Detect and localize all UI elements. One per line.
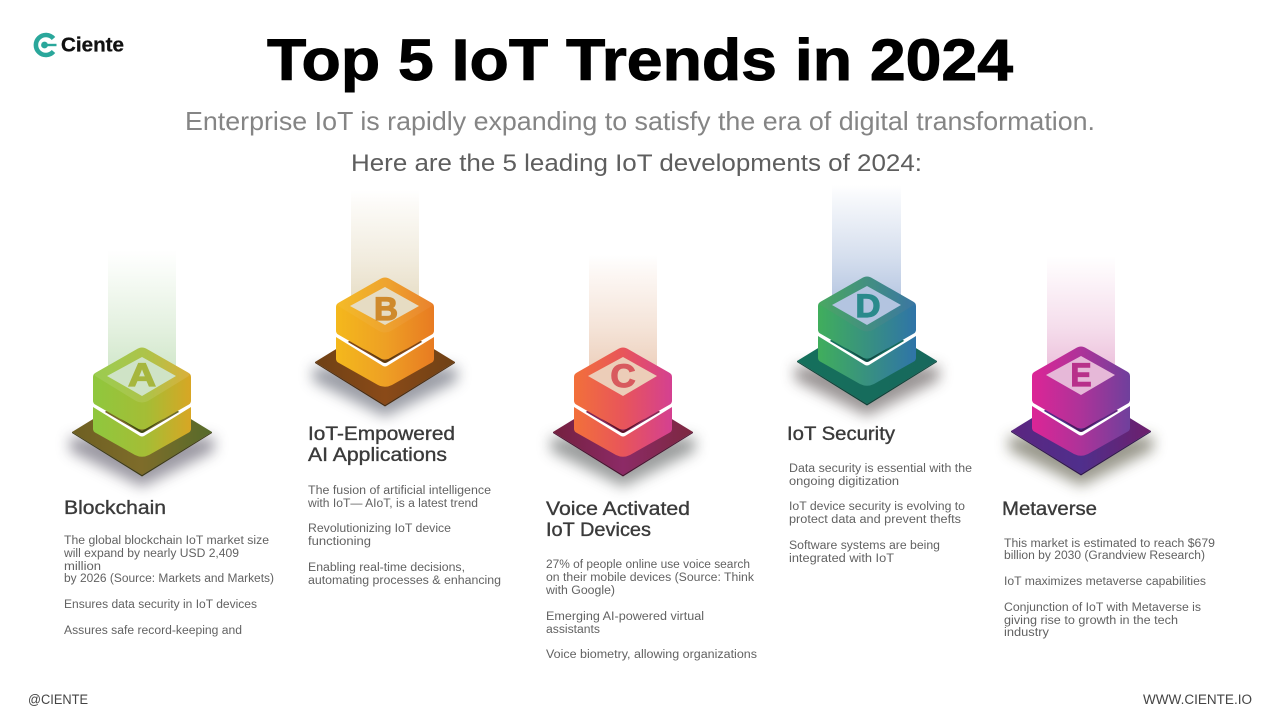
heading: IoT Devices bbox=[546, 520, 651, 541]
text block: million bbox=[64, 561, 101, 573]
logo: Ciente: Ciente bbox=[61, 34, 124, 56]
heading: IoT-Empowered bbox=[308, 424, 455, 445]
text block: Conjunction of IoT with Metaverse is bbox=[1004, 602, 1201, 614]
footer: handle: @CIENTE bbox=[28, 692, 88, 707]
text block: billion by 2030 (Grandview Research) bbox=[1004, 550, 1205, 562]
heading: Blockchain bbox=[64, 498, 166, 519]
heading: AI Applications bbox=[308, 445, 447, 466]
text block bbox=[63, 535, 274, 637]
logo: Ciente bbox=[36, 34, 124, 56]
text block: with IoT— AIoT, is a latest trend bbox=[307, 498, 478, 510]
text block bbox=[789, 463, 972, 565]
icon: block A bbox=[70, 250, 214, 487]
text block: Software systems are being bbox=[789, 540, 940, 552]
text block: functioning bbox=[308, 536, 371, 548]
panel: Blockchain bbox=[63, 250, 274, 637]
icon: block B bbox=[313, 190, 457, 417]
heading bbox=[546, 499, 690, 541]
text block: with Google) bbox=[545, 585, 615, 597]
icon: block A: A bbox=[128, 357, 156, 393]
text block: Revolutionizing IoT device bbox=[308, 523, 451, 535]
icon: block C: C bbox=[610, 358, 636, 394]
text block: Data security is essential with the bbox=[789, 463, 972, 475]
text block: on their mobile devices (Source: Think bbox=[546, 572, 754, 584]
text block: Assures safe record-keeping and bbox=[64, 625, 242, 637]
text block: 27% of people online use voice search bbox=[546, 559, 750, 571]
text block bbox=[307, 485, 501, 587]
text block: assistants bbox=[546, 624, 600, 636]
heading bbox=[308, 424, 455, 466]
icon: block E: E bbox=[1070, 357, 1092, 393]
text block: industry bbox=[1004, 627, 1049, 639]
panel: IoT Security bbox=[787, 185, 972, 565]
icon: block D bbox=[795, 185, 939, 416]
text block: integrated with IoT bbox=[789, 553, 894, 565]
panel: Metaverse bbox=[1002, 256, 1215, 639]
text block: protect data and prevent thefts bbox=[789, 514, 961, 526]
panel: Voice Activated IoT Devices bbox=[545, 255, 757, 661]
text block bbox=[545, 559, 757, 661]
icon: block D: D bbox=[856, 288, 880, 324]
text block: IoT device security is evolving to bbox=[789, 501, 965, 513]
text block: Enabling real-time decisions, bbox=[308, 562, 465, 574]
text block: The fusion of artificial intelligence bbox=[308, 485, 491, 497]
text block: IoT maximizes metaverse capabilities bbox=[1004, 576, 1206, 588]
icon: block E bbox=[1009, 256, 1153, 486]
text block: This market is estimated to reach $679 bbox=[1004, 538, 1215, 550]
subtitle: Here are the 5 leading IoT developments of 2024: bbox=[351, 150, 922, 177]
text block: will expand by nearly USD 2,409 bbox=[63, 548, 239, 560]
icon: block B: B bbox=[374, 291, 398, 327]
text block: giving rise to growth in the tech bbox=[1004, 615, 1178, 627]
heading: Voice Activated bbox=[546, 499, 690, 520]
text block: Voice biometry, allowing organizations bbox=[546, 649, 757, 661]
icon: block C bbox=[551, 255, 695, 487]
text block: ongoing digitization bbox=[789, 476, 899, 488]
heading: IoT Security bbox=[787, 424, 896, 445]
footer: website: WWW.CIENTE.IO bbox=[1143, 692, 1252, 707]
heading: Metaverse bbox=[1002, 499, 1097, 520]
text block: The global blockchain IoT market size bbox=[64, 535, 269, 547]
subtitle: Enterprise IoT is rapidly expanding to satisfy the era of digital transformation. bbox=[185, 106, 1095, 136]
text block: automating processes & enhancing bbox=[308, 575, 501, 587]
panel: IoT-Empowered AI Applications bbox=[307, 190, 501, 587]
text block: Emerging AI-powered virtual bbox=[546, 611, 704, 623]
subtitle bbox=[185, 106, 1095, 177]
text block bbox=[1004, 538, 1215, 639]
text block: Ensures data security in IoT devices bbox=[64, 599, 257, 611]
text block: by 2026 (Source: Markets and Markets) bbox=[64, 573, 274, 585]
title: Top 5 IoT Trends in 2024 bbox=[267, 28, 1013, 93]
